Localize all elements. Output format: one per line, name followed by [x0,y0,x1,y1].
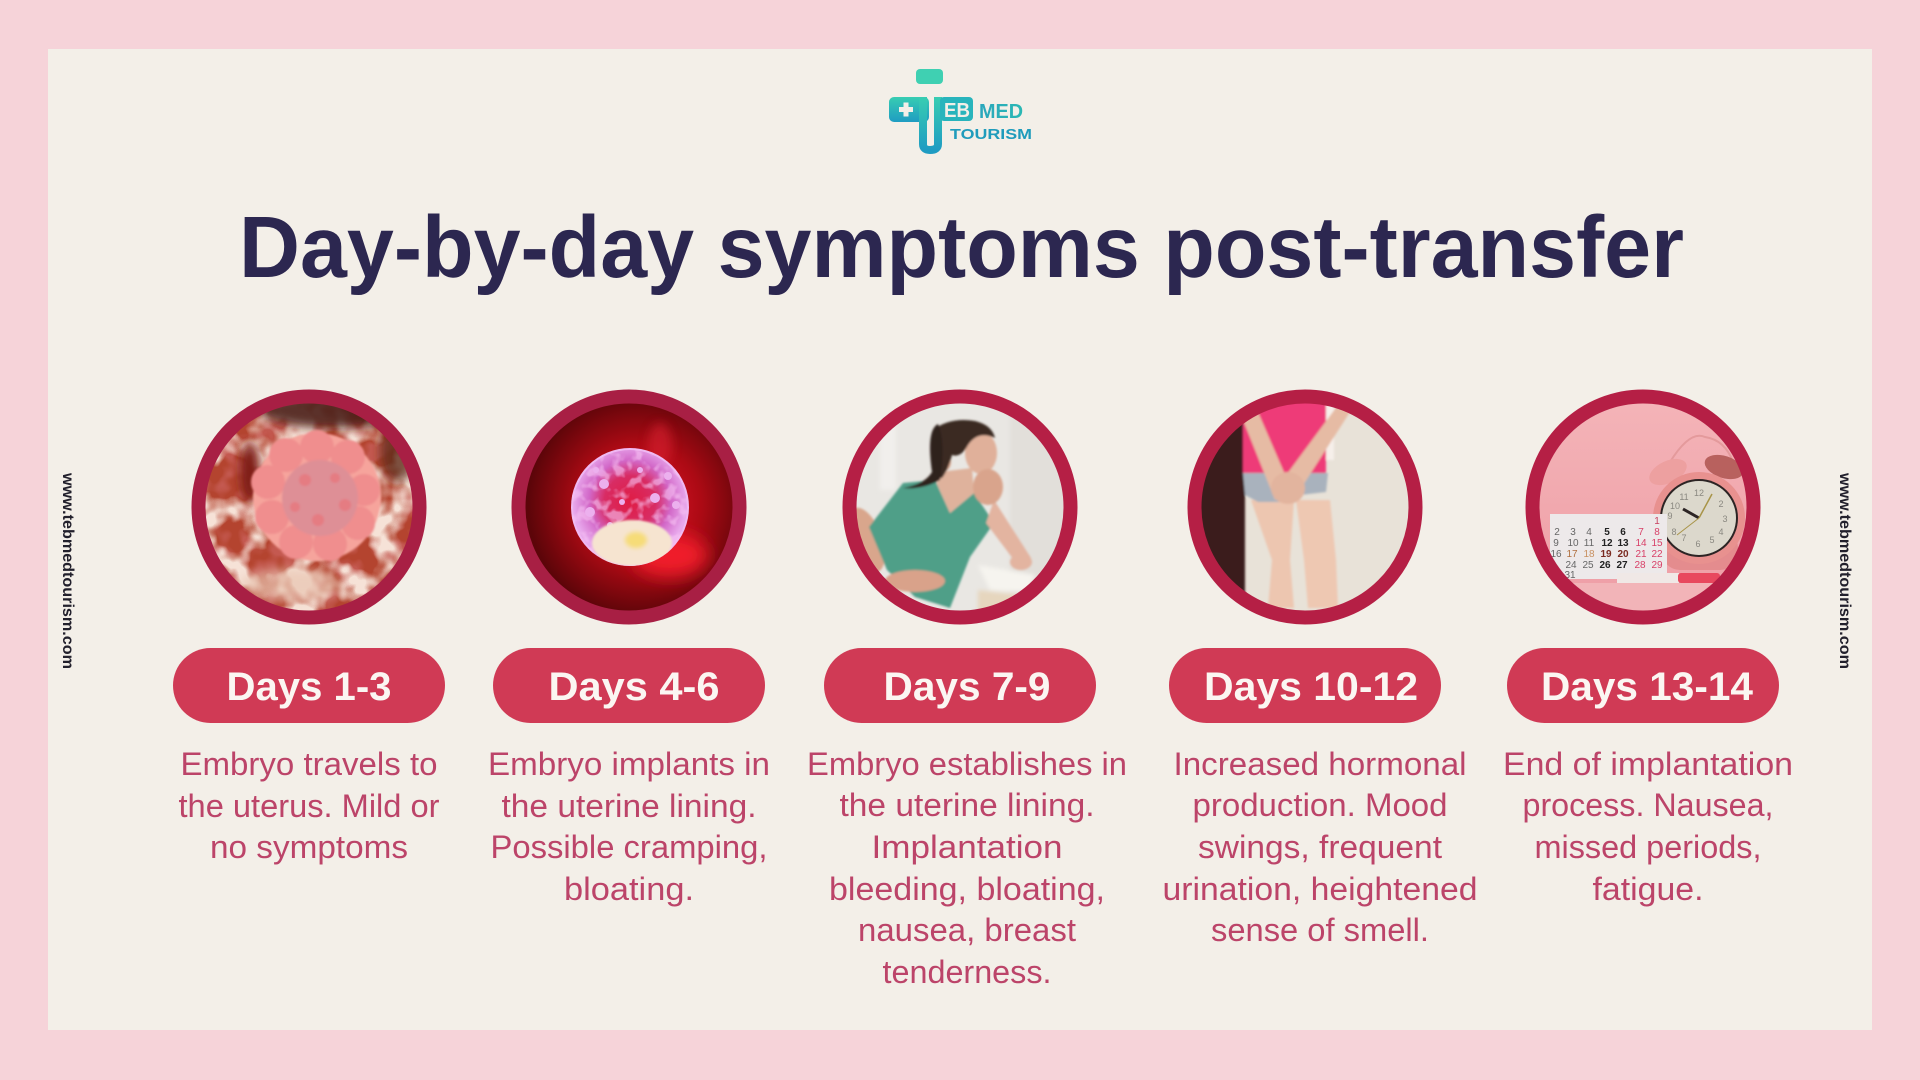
calendar: 13 [1617,538,1629,549]
day label pill: Days 4-6 [548,665,720,709]
calendar: 12 [1601,538,1613,549]
calendar: 8 [1654,527,1660,538]
logo: TEB Med Tourism: EB [944,100,970,122]
description: process. Nausea, [1522,787,1774,823]
calendar: 29 [1651,560,1663,571]
description [1503,746,1793,907]
image: woman holding bladder [1202,404,1408,610]
calendar: 9 [1553,538,1559,549]
image: woman with nausea [856,404,1064,610]
alarm clock: 10 [1670,501,1680,511]
panel: days 1-3 [173,392,445,865]
description: urination, heightened [1162,871,1478,907]
description: Embryo establishes in [807,746,1127,782]
logo: TEB Med Tourism: MED [979,101,1023,123]
image: alarm clock and calendar [1540,404,1746,610]
description: Embryo implants in [488,746,770,782]
day label pill: Days 7-9 [884,665,1050,709]
description: Embryo travels to [180,746,438,782]
calendar: 19 [1600,549,1612,560]
alarm clock: 11 [1679,492,1689,502]
day label pill [1507,648,1779,723]
alarm clock: 2 [1718,499,1724,509]
panel: days 7-9 [807,396,1127,990]
title: Day-by-day symptoms post-transfer [239,199,1684,296]
calendar [1550,514,1667,581]
alarm clock: 7 [1681,533,1687,543]
calendar: 20 [1617,549,1629,560]
calendar: 1 [1654,516,1660,527]
calendar: 6 [1620,527,1626,538]
description: production. Mood [1192,787,1448,823]
calendar: 16 [1550,549,1562,560]
image: glowing embryo cell [526,404,732,610]
description [488,746,770,907]
panel: days 10-12 [1162,396,1478,948]
alarm clock: 3 [1722,514,1728,524]
calendar: 7 [1638,527,1644,538]
description: fatigue. [1592,871,1704,907]
ring [1532,396,1754,618]
calendar: 2 [1554,527,1560,538]
description: Increased hormonal [1174,746,1466,782]
calendar: 26 [1599,560,1611,571]
calendar: 3 [1570,527,1576,538]
calendar: 15 [1651,538,1663,549]
logo: TEB Med Tourism [889,69,1032,150]
description [807,746,1127,990]
alarm clock: 5 [1709,535,1715,545]
description: Possible cramping, [490,829,768,865]
calendar: 18 [1583,549,1595,560]
description: missed periods, [1534,829,1762,865]
pregnancy test [1617,573,1720,583]
alarm clock: 6 [1695,539,1701,549]
calendar: 10 [1567,538,1579,549]
description: nausea, breast [858,912,1076,948]
description: no symptoms [210,829,408,865]
side url right: www.tebmedtourism.com [1836,472,1853,669]
ring [198,396,420,618]
day label pill: Days 1-3 [226,665,392,709]
description: Implantation [872,829,1062,865]
alarm clock: 9 [1667,511,1673,521]
description [1162,746,1478,948]
logo: TEB Med Tourism: TOURISM [950,126,1032,143]
description: the uterine lining. [840,787,1094,823]
day label pill: Days 10-12 [1204,665,1418,709]
calendar: 17 [1566,549,1578,560]
ring [518,396,740,618]
description: End of implantation [1503,746,1793,782]
description [178,746,440,865]
day label pill [493,648,765,723]
day label pill [173,648,445,723]
alarm clock: 4 [1718,527,1724,537]
description: tenderness. [882,954,1052,990]
calendar: 27 [1616,560,1628,571]
calendar: 21 [1635,549,1647,560]
description: sense of smell. [1211,912,1429,948]
description: the uterus. Mild or [178,788,440,824]
day label pill [1169,648,1441,723]
calendar: 5 [1604,527,1610,538]
side url left: www.tebmedtourism.com [59,472,76,669]
calendar: 11 [1584,538,1595,549]
calendar: 25 [1582,560,1594,571]
alarm clock: 8 [1671,527,1677,537]
image: blastocyst on uterine tissue [206,404,412,610]
panel: days 4-6 [488,393,770,907]
ring [1194,396,1416,618]
description: bloating. [564,871,694,907]
alarm clock [1645,436,1746,570]
calendar: 24 [1565,560,1577,571]
calendar: 31 [1564,570,1576,581]
description: the uterine lining. [502,788,756,824]
description: bleeding, bloating, [829,871,1105,907]
description: swings, frequent [1198,829,1442,865]
calendar: 14 [1635,538,1647,549]
day label pill [824,648,1096,723]
alarm clock: 12 [1694,488,1704,498]
day label pill: Days 13-14 [1541,665,1754,709]
calendar: 22 [1651,549,1663,560]
calendar: 28 [1634,560,1646,571]
ring [850,396,1070,618]
panel: days 13-14 [1503,396,1793,907]
calendar: 4 [1586,527,1592,538]
